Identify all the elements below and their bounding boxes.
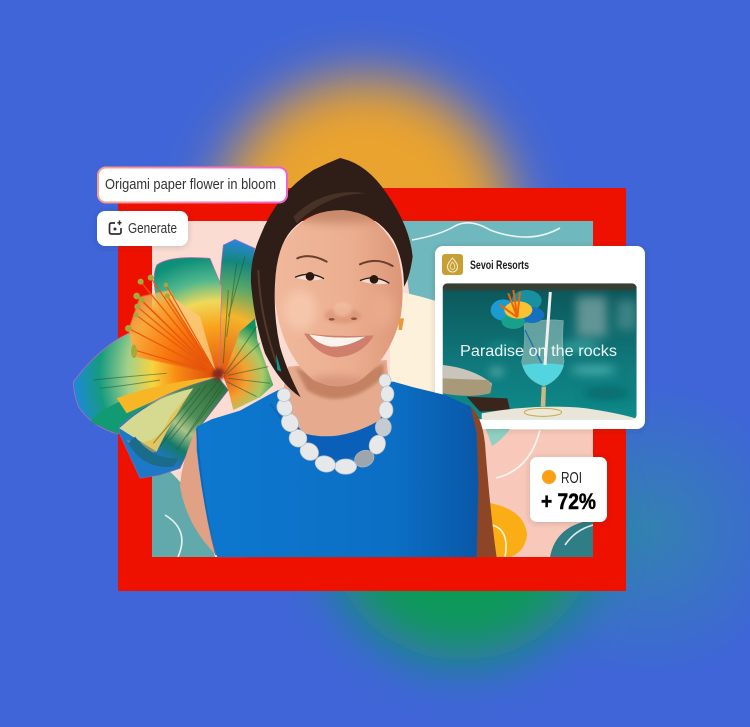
cocktail glass — [522, 292, 564, 416]
mouth — [304, 333, 374, 357]
prompt input box: Origami paper flower in bloom — [105, 176, 276, 193]
eyebrows — [297, 256, 393, 266]
necklace — [274, 374, 394, 474]
arms — [180, 428, 247, 557]
prompt input box — [98, 168, 287, 202]
earrings — [276, 318, 404, 372]
photo: cocktail by the pool — [443, 283, 637, 419]
hair — [251, 158, 413, 397]
stamen fan — [125, 275, 217, 374]
red frame — [118, 188, 626, 591]
sweater — [197, 382, 478, 557]
card: Sevoi Resorts ad — [435, 246, 645, 429]
nose — [324, 302, 361, 324]
ad headline: Paradise on the rocks — [460, 343, 617, 360]
icon: generate sparkle — [110, 220, 122, 234]
eyes — [295, 272, 389, 284]
person — [180, 158, 497, 557]
collar — [295, 417, 383, 459]
ROI card — [530, 457, 607, 522]
generate button — [97, 211, 188, 246]
generate button: Generate — [128, 220, 177, 237]
ROI dot — [542, 470, 556, 484]
small flower — [491, 290, 544, 329]
ROI card: ROI — [561, 470, 582, 487]
panel: abstract collage background — [152, 221, 593, 557]
face — [274, 200, 403, 391]
brand name: Sevoi Resorts — [470, 260, 529, 272]
icon: Sevoi logo — [442, 254, 463, 275]
ROI value: + 72% — [541, 489, 596, 514]
neck — [282, 360, 389, 436]
icon: origami flower — [73, 239, 273, 478]
